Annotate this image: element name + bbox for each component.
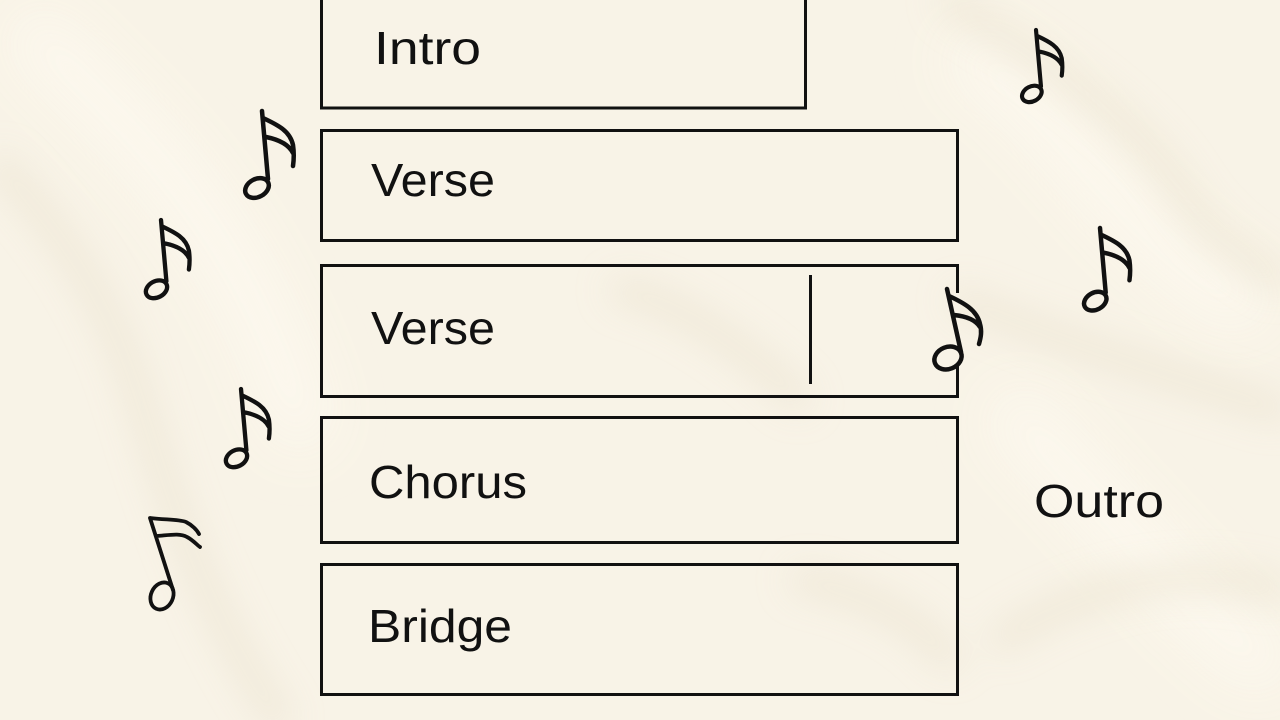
- icon: music note over box edge: [931, 289, 981, 373]
- icon: music note left upper: [242, 111, 294, 202]
- label: Bridge: Bridge: [368, 600, 512, 652]
- label: Chorus: Chorus: [369, 456, 527, 508]
- label: Verse 2: Verse: [371, 302, 495, 354]
- icon: music note far left: [143, 220, 190, 302]
- label: Outro: Outro: [1034, 475, 1164, 527]
- vertical divider: [809, 275, 812, 384]
- icon: music note lower left: [146, 518, 200, 613]
- box: Chorus: [322, 418, 958, 542]
- box: Verse 1: [322, 130, 958, 240]
- box: Bridge: [322, 564, 958, 694]
- box: Intro: [322, 0, 806, 108]
- icon: music note top right: [1019, 30, 1062, 105]
- icon: music note left middle: [223, 389, 270, 471]
- label: Intro: Intro: [374, 22, 481, 74]
- label: Verse 1: Verse: [371, 154, 495, 206]
- icon: music note right: [1081, 228, 1130, 314]
- box: Verse 2: [322, 266, 958, 396]
